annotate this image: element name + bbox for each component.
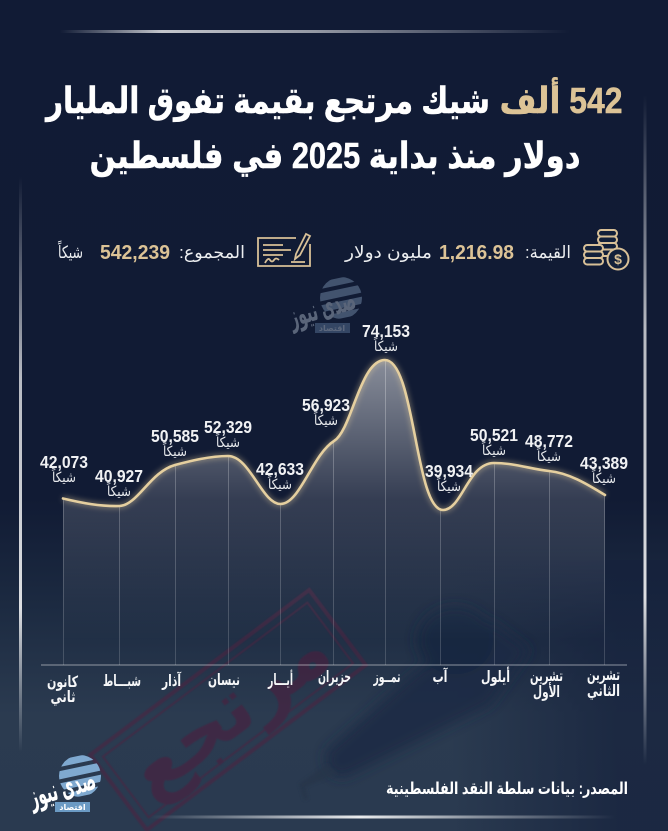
data labels bbox=[40, 321, 628, 499]
month labels: ثاني bbox=[50, 689, 76, 707]
data labels: 56,923 bbox=[302, 395, 350, 415]
data labels: 50,521 bbox=[470, 425, 518, 445]
icon: coins bbox=[584, 230, 628, 270]
data labels: 48,772 bbox=[525, 431, 573, 451]
title line one: شيك مرتجع بقيمة تفوق المليار bbox=[44, 80, 490, 122]
data labels: شيكاً bbox=[216, 432, 240, 450]
value unit: مليون دولار bbox=[344, 243, 432, 262]
data labels: شيكاً bbox=[482, 440, 506, 458]
month labels: أيلول bbox=[481, 667, 510, 686]
chart line glow bbox=[63, 360, 605, 510]
month labels bbox=[47, 667, 620, 707]
data labels: 40,927 bbox=[95, 466, 143, 486]
watermark logo bbox=[292, 277, 362, 334]
month labels: آب bbox=[432, 667, 448, 686]
data labels: 43,389 bbox=[580, 453, 628, 473]
total unit: شيكاً bbox=[57, 239, 83, 262]
chart: area and line bbox=[63, 360, 605, 665]
logo tag bbox=[55, 802, 90, 812]
value number: 1,216.98 bbox=[439, 242, 514, 264]
month labels: تمــوز bbox=[373, 669, 400, 686]
data labels: شيكاً bbox=[314, 410, 338, 428]
title bbox=[44, 77, 622, 177]
data labels: شيكاً bbox=[537, 446, 561, 464]
month labels: آذار bbox=[161, 671, 181, 690]
logo bbox=[32, 755, 101, 814]
data labels: شيكاً bbox=[268, 474, 292, 492]
icon: cheque bbox=[258, 234, 310, 266]
background image: rejected stamp bbox=[90, 590, 366, 830]
stat: total cheques bbox=[57, 234, 310, 266]
title line two: دولار منذ بداية 2025 في فلسطين bbox=[90, 135, 580, 177]
x axis bbox=[41, 664, 627, 666]
bottom divider bbox=[150, 816, 615, 818]
stamp word: مرتجع bbox=[110, 607, 348, 816]
logo globe bbox=[59, 755, 101, 797]
logo wordmark: صدى نيوز bbox=[24, 763, 99, 814]
total number: 542,239 bbox=[100, 242, 170, 264]
data labels: 42,073 bbox=[40, 452, 88, 472]
top divider bbox=[60, 30, 570, 33]
data labels: شيكاً bbox=[52, 467, 76, 485]
title highlight: 542 ألف bbox=[499, 77, 622, 121]
total label: المجموع: bbox=[179, 243, 245, 263]
data labels: شيكاً bbox=[163, 441, 187, 459]
watermark logo: اقتصاد bbox=[319, 324, 345, 333]
data labels: شيكاً bbox=[374, 336, 398, 354]
data labels: شيكاً bbox=[437, 476, 461, 494]
month labels: نيسان bbox=[208, 672, 240, 689]
data labels: شيكاً bbox=[592, 468, 616, 486]
logo: اقتصاد bbox=[59, 803, 86, 812]
icon: coins: $ bbox=[614, 251, 622, 267]
pen tip bbox=[299, 764, 338, 800]
month labels: حزيران bbox=[318, 669, 351, 686]
data labels: 42,633 bbox=[256, 459, 304, 479]
background image: pen bbox=[325, 606, 530, 777]
left side line bbox=[19, 177, 22, 752]
watermark logo: صدى نيوز bbox=[284, 283, 359, 334]
right side line bbox=[644, 95, 646, 765]
month labels: الأول bbox=[533, 682, 560, 701]
month labels: تشرين bbox=[530, 668, 563, 685]
data labels: شيكاً bbox=[107, 481, 131, 499]
month labels: تشرين bbox=[587, 667, 620, 684]
month labels: كانون bbox=[47, 674, 79, 691]
chart line bbox=[63, 360, 605, 510]
darker right side of background bbox=[334, 560, 668, 831]
data labels: 74,153 bbox=[362, 321, 410, 341]
data labels: 39,934 bbox=[425, 461, 473, 481]
month labels: أيـــار bbox=[267, 670, 293, 689]
data labels: 50,585 bbox=[151, 426, 199, 446]
chart area fill bbox=[63, 360, 605, 665]
data labels: 52,329 bbox=[204, 417, 252, 437]
month labels: الثاني bbox=[587, 683, 620, 701]
month labels: شبـــاط bbox=[103, 673, 141, 690]
value label: القيمة: bbox=[525, 243, 571, 262]
chart grid lines bbox=[64, 360, 604, 665]
stat: value in dollars bbox=[344, 230, 628, 270]
